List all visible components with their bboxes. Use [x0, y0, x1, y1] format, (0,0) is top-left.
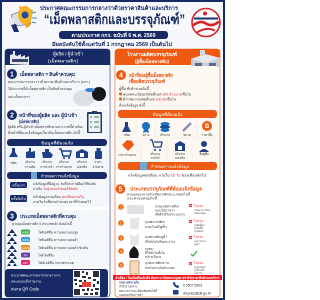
panel: right packaging factories [113, 49, 222, 297]
schedule row: first time: ภายใน วันทุกครบกำหนดใช้บังคับ [33, 187, 78, 192]
reporting deadline: แจ้งข้อมูลทุกเดือน ภายใน 15 วัน ของเดือนถัดไป [128, 172, 206, 178]
icon row: data items: ปริมาณ [59, 160, 69, 164]
bar: reporting schedule: กำหนดการแจ้งข้อมูล [41, 173, 80, 179]
logo: red circle emblem [192, 8, 220, 36]
packaging row 4: garbage bag: ที่ใช้ทั่วไปทั้งใน [145, 250, 165, 255]
type row: PET: โพลิเอทิลีน เทเรฟทาเลต [38, 260, 74, 265]
packaging row 3: handle bag: ที่ใช้ทั่วไปในชีวิตประจำวัน [145, 240, 175, 244]
card 3: plastic types: ประเภทเม็ดพลาสติกที่ควบคุม [20, 212, 76, 220]
contact: organisation: สำนักงานกลาง [119, 284, 137, 288]
type row: PP [7, 252, 55, 259]
packaging row 1: food tray: (ที่ผลิตได้ในจำนวนมาก) [155, 212, 185, 216]
card 5: packaging types: ประเภทบรรจุภัณฑ์ที่ต้องแจ้งข้อมูล [130, 184, 202, 194]
type row: HDPE: HDPE [22, 230, 30, 234]
contact: organisation: กองส่งเสริมการค้า [119, 293, 143, 297]
icon: factory [191, 50, 220, 71]
card 1: plastic pellets [6, 66, 108, 107]
panel: QR code box: ประกาศคณะกรรมการกลางฯ กกร. [11, 274, 61, 278]
packaging row 1: food tray [118, 204, 211, 216]
contact: organisation: กรมการค้าภายใน [119, 280, 140, 284]
icon row: data items: จำหน่าย [93, 165, 104, 169]
packaging row 2: bag [118, 218, 205, 234]
card 4: duties of factories: ต้องแจ้งข้อมูล ดังนี้ [119, 102, 146, 108]
packaging row 2: bag: ไม่รวม [193, 219, 203, 223]
icon row: data items: ราคา [94, 160, 102, 164]
bar: required data: ข้อมูลที่ต้องแจ้ง [152, 112, 183, 118]
packaging row 3: handle bag: ถุงผ้า [194, 242, 200, 247]
icon row: data items: ราคาจำหน่าย [118, 153, 136, 157]
panel header: factories: (ผู้ซื้อเม็ดพลาสติก) [135, 57, 170, 65]
schedule row: following times: ครั้งถัดไป [11, 196, 27, 201]
effective date: มีผลบังคับใช้ตั้งแต่วันที่ 1 กรกฎาคม 2569 เป็นต้นไป [52, 39, 172, 48]
contact: organisation: สอบถามรายละเอียดเพิ่มเติมได้ที่ [119, 289, 157, 293]
card 3: plastic types: 3 [10, 214, 14, 220]
packaging row 5: film: ถุงผ้าใบ [194, 271, 203, 276]
card 4: duties of factories: มีกำลังการผลิตตั้งแต่ 100 ตันขึ้นไป [123, 96, 176, 102]
card 2: duties of producers: ผู้ผลิต หรือ ผู้นำเข้าเม็ดพลาสติกตามประกาศนี้ต่างต้อง [8, 123, 83, 129]
packaging row 5: film [118, 261, 206, 276]
panel header: factories [115, 49, 220, 71]
card 5: packaging types [116, 181, 218, 276]
card 5: packaging types: และครอบคลุมดังนี้ [127, 196, 158, 202]
type row: LLDPE: LLDPE [21, 246, 30, 250]
packaging row 3: handle bag: ถุงพลาสติกหูหิ้ว [145, 234, 167, 240]
badge: announcement number [59, 31, 168, 39]
card 4: duties of factories: 4 [119, 72, 123, 80]
card 2: duties of producers [6, 109, 108, 207]
icon row: data items: การนำเข้า [40, 165, 54, 169]
type row: LDPE: LDPE [22, 238, 29, 242]
card 3: plastic types [6, 210, 108, 267]
panel header: producers: ผู้ผลิต / ผู้นำเข้า [53, 50, 83, 58]
packaging row 2: bag: แบบไม่มีหูหิ้ว [145, 224, 167, 229]
icon row: data items: ปริมาณ [175, 152, 185, 156]
card 2: duties of producers: 2 [10, 112, 14, 120]
card 2: duties of producers: มีหน้าที่ต้องแจ้งข้อมูลเกี่ยวกับเม็ดพลาสติก ดังนี้ [8, 129, 81, 135]
icon: checklist [87, 111, 102, 133]
type row: PP: โพลิโพรพีลีน [38, 252, 55, 258]
packaging row 2: bag: 2 [120, 222, 122, 226]
bar: reporting schedule: กำหนดการแจ้งข้อมูล [151, 164, 190, 170]
icon row: data items: ราคาซื้อ [202, 132, 213, 137]
packaging row 4: garbage bag: 4 [120, 250, 122, 254]
card 1: plastic pellets: อย่างเป็นทางการ [8, 93, 30, 99]
type row: LLDPE: โพลิเอทิลีน ความหนาแน่นต่ำเชิงเส้น [38, 245, 89, 250]
icon row: data items: ชื่อผู้ซื้อ [199, 151, 209, 156]
packaging row 1: food tray: กล่องพลาสติก [155, 204, 179, 208]
card 4: duties of factories: หน้าที่ของผู้ซื้อเม็ดพลาสติก [129, 70, 173, 80]
schedule row: first time [10, 181, 96, 192]
icon row: data items: การจำหน่าย [56, 165, 72, 169]
icon row: data items: ปริมาณ [77, 160, 87, 164]
type row: PET: PET [23, 261, 29, 265]
card 1: plastic pellets: ได้ประกาศให้ เม็ดพลาสติก เป็นสินค้าควบคุม [7, 85, 73, 92]
icon row: data items: B [205, 124, 210, 130]
packaging row 5: film: ถุงกระสอบ [194, 265, 206, 270]
icon row: data items: ปริมาณ [42, 160, 52, 164]
panel header: producers: (เม็ดพลาสติก) [48, 56, 79, 64]
icon: pellets [73, 87, 106, 106]
type row: LDPE [7, 237, 78, 244]
icon row: data items [118, 121, 217, 160]
badge: announcement number: ตามประกาศ กกร. ฉบับที่ 6 พ.ศ. 2569 [72, 31, 156, 39]
panel: QR code box: สแกน QR Code [11, 286, 40, 292]
icon row: data items: คงเหลือ [175, 155, 185, 160]
icon: megaphone [9, 6, 37, 32]
packaging row 5: film: 5 [120, 264, 122, 268]
icon row: data items: ปริมาณ [160, 133, 170, 137]
packaging row 1: food tray: ไม่รวม [193, 204, 203, 208]
schedule row: following times: ภายในวันที่ครบกำหนดเวลาที่กำหนดไว้ [33, 199, 91, 204]
type row: PP: PP [24, 253, 27, 257]
panel: QR code box [5, 269, 108, 297]
schedule row: following times [10, 194, 91, 204]
type row: HDPE [7, 229, 78, 236]
packaging row 3: handle bag [118, 234, 206, 247]
card 4: duties of factories: ผู้ซื้อ ที่เข้าข่ายดังนี้ [119, 86, 150, 91]
panel: QR code box: และแบบแจ้งรายงาน [11, 278, 42, 284]
packaging row 5: film: สำหรับบรรจุสินค้าเกษตร [145, 266, 175, 271]
icon row: data items: ปริมาณ [25, 160, 35, 164]
packaging row 5: film: ถุงบิ๊กแบ็ก [194, 267, 205, 273]
bar: required data: ข้อมูลที่ต้องแจ้ง [41, 140, 73, 146]
packaging row 1: food tray: กล่องไม่ขุ่น [194, 211, 206, 216]
card 5: packaging types: ครอบคลุมบรรจุภัณฑ์พลาสติกประเภทต่อไปนี้ [127, 192, 191, 198]
card 4: duties of factories [116, 66, 218, 178]
QR code [73, 270, 100, 296]
heading: announcement line: ประกาศคณะกรรมการกลางว่าด้วยราคาสินค้าและบริการ [40, 4, 178, 12]
packaging row 1: food tray: 1 [120, 206, 122, 210]
card 5: packaging types: 5 [119, 186, 123, 194]
icon row: data items: คงเหลือ [77, 164, 87, 169]
packaging row 2: bag: ถุงซิปล็อก [194, 222, 205, 228]
packaging row 2: bag: ถุงพลาสติก [145, 220, 165, 225]
schedule row: following times: แจ้งข้อมูลรายเดือน ทุกเดือนภายใน [33, 194, 85, 200]
icon row: data items: ชนิด [124, 133, 130, 137]
title: “เม็ดพลาสติกและบรรจุภัณฑ์” [44, 10, 185, 28]
contact: organisation [119, 280, 157, 297]
packaging row 3: handle bag: 3 [120, 236, 122, 240]
packaging row 2: bag: ถุงกันชื้น [194, 226, 204, 231]
packaging row 3: handle bag: ถุงกระดาษ [194, 240, 206, 244]
contact: email [173, 290, 211, 295]
card 1: plastic pellets: 1 [10, 72, 14, 78]
contact: phone: 0 2507 5503 [183, 284, 202, 288]
schedule row: first time: แจ้งข้อมูลที่มีอยู่ ณ วันที่ประกาศมีผลใช้บังคับ [33, 181, 96, 186]
icon row: data items: ตรวจ [142, 133, 150, 137]
type row: LDPE: โพลิเอทิลีน ความหนาแน่นต่ำ [38, 237, 78, 242]
card 1: plastic pellets: คณะกรรมการกลางว่าด้วยราคาสินค้าและบริการ (กกร.) [8, 79, 90, 84]
packaging row 4: garbage bag: ครัวเรือน [145, 254, 161, 259]
type row: HDPE: โพลิเอทิลีน ความหนาแน่นสูง [38, 230, 78, 234]
packaging row 3: handle bag: ไม่รวม [193, 235, 203, 239]
icon row: data items [9, 148, 104, 169]
icon row: data items: ขนาด [183, 133, 191, 137]
card 4: duties of factories: ทุนจดทะเบียนบริษัทตั้งแต่ 100 ล้านบาทขึ้นไป [123, 92, 191, 98]
icon row: data items: ปริมาณ [150, 152, 160, 156]
type row: PET [7, 259, 74, 266]
panel: left producers [5, 49, 110, 297]
card 2: duties of producers: (เม็ดพลาสติก) [19, 118, 39, 124]
banner: penalty warning [113, 274, 222, 281]
type row: LLDPE [7, 245, 89, 252]
packaging row 1: food tray: แบบใส่อาหาร [155, 208, 175, 212]
contact: phone [173, 282, 202, 288]
icon row: data items: การผลิต [25, 165, 35, 169]
panel header: factories: โรงงานผลิตบรรจุภัณฑ์ [126, 51, 177, 58]
packaging row 4: garbage bag: ถุงขยะ [145, 247, 154, 252]
packaging row 4: garbage bag [118, 246, 197, 259]
card 1: plastic pellets: เม็ดพลาสติก = สินค้าควบคุม [20, 70, 75, 78]
icon row: data items: ขายได้ [151, 156, 160, 160]
icon row: data items: ชนิด [10, 161, 17, 165]
packaging row 1: food tray: ถาดอาหารร้อน [194, 208, 211, 212]
panel header: producers [5, 49, 110, 65]
card 4: duties of factories: เพื่อผลิตบรรจุภัณฑ์ [129, 77, 165, 85]
card 3: plastic types: ควบคุมเม็ดพลาสติก 5 ประเภทหลัก ดังต่อไปนี้ [12, 220, 73, 227]
contact: email: dit.price@dit.go.th [183, 291, 211, 295]
packaging row 2: bag: ถุงฟอยล์ [194, 229, 203, 234]
packaging row 5: film: ถุงพลาสติกสาน [145, 261, 169, 266]
packaging row 5: film: ไม่รวม [193, 261, 203, 265]
card 2: duties of producers: หน้าที่ของผู้ผลิต และ ผู้นำเข้า [19, 111, 77, 120]
schedule row: first time: ครั้งแรก [12, 182, 25, 188]
